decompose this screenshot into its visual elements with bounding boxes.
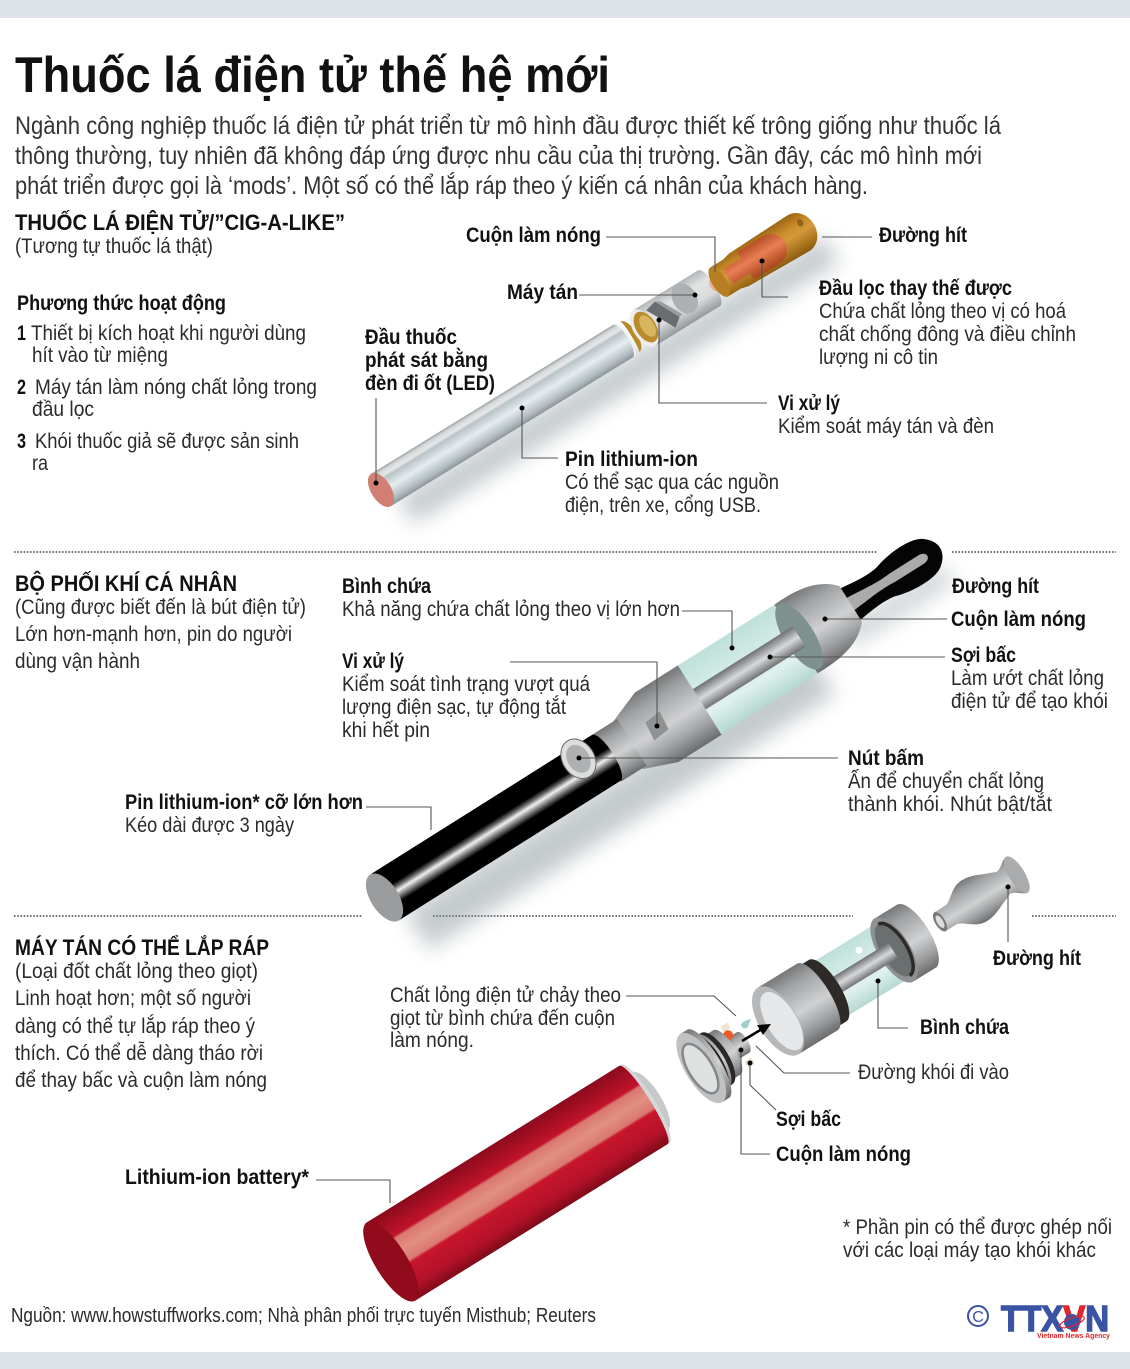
arrow: vapour path: [742, 1024, 771, 1041]
label: tank: Bình chứa: [342, 575, 431, 598]
step 2: Máy tán làm nóng chất lỏng trong: [35, 376, 317, 399]
label: wick: [768, 644, 1108, 713]
source line: Nguồn: www.howstuffworks.com; Nhà phân phối trực tuyến Misthub; Reuters: [11, 1305, 596, 1327]
heading: rebuildable atomizer: MÁY TÁN CÓ THỂ LẮP RÁP: [15, 935, 269, 960]
panel: personal vaporizer description: [15, 570, 306, 673]
label: liquid flow: [390, 984, 736, 1052]
label: heating coil: Cuộn làm nóng: [776, 1143, 911, 1166]
label: heating coil: Cuộn làm nóng: [466, 224, 601, 247]
label: larger lithium-ion battery: Kéo dài được 3 ngày: [125, 814, 294, 837]
label: LED tip: phát sát bằng: [365, 348, 488, 372]
label: airflow: [756, 1046, 1009, 1084]
label: microprocessor: [656, 318, 994, 438]
label: tank: Khả năng chứa chất lỏng theo vị lớn hơn: [342, 598, 680, 621]
illustration: rebuildable atomizer parts: [667, 836, 1044, 1111]
panel: cig-a-like description: [15, 209, 345, 475]
label: tank: [876, 978, 1009, 1039]
label: microprocessor: Vi xử lý: [342, 650, 404, 673]
description: dàng có thể tự lắp ráp theo ý: [15, 1015, 255, 1038]
label: liquid flow: Chất lỏng điện tử chảy theo: [390, 984, 621, 1007]
heading: how it works: Phương thức hoạt động: [17, 292, 226, 315]
label: button: [576, 747, 1052, 816]
label: tank: [342, 575, 734, 650]
label: replaceable cartridge: chất chống đông và điều chỉnh: [819, 323, 1076, 346]
intro text: Ngành công nghiệp thuốc lá điện tử phát triển từ mô hình đầu được thiết kế trông giống như thuốc lá: [15, 112, 1001, 140]
footnote: [843, 1216, 1112, 1262]
label: lithium-ion battery: Pin lithium-ion: [565, 448, 698, 471]
label: microprocessor: Vi xử lý: [778, 392, 840, 415]
description: (Loại đốt chất lỏng theo giọt): [15, 960, 258, 983]
heading: cig-a-like: THUỐC LÁ ĐIỆN TỬ/”CIG-A-LIKE”: [15, 209, 345, 235]
label: inhale path: Đường hít: [993, 947, 1081, 970]
description: để thay bấc và cuộn làm nóng: [15, 1069, 267, 1092]
label: wick: Làm ướt chất lỏng: [951, 667, 1104, 690]
label: LED tip: Đầu thuốc: [365, 326, 457, 349]
label: inhale path: Đường hít: [952, 575, 1039, 598]
label: inhale path: [993, 884, 1081, 970]
callouts: rebuildable atomizer: [125, 884, 1081, 1203]
label: wick: điện tử để tạo khói: [951, 690, 1108, 713]
intro text: thông thường, tuy nhiên đã không đáp ứng được nhu cầu của thị trường. Gần đây, các mô hình mới: [15, 142, 982, 170]
label: microprocessor: [342, 650, 660, 742]
illustration: personal vaporizer: [351, 514, 976, 963]
label: lithium-ion battery: [125, 1166, 390, 1203]
step 1: hít vào từ miệng: [32, 344, 168, 367]
label: heating coil: Cuộn làm nóng: [951, 608, 1086, 631]
step 1: [17, 322, 306, 367]
intro text: phát triển được gọi là ‘mods’. Một số có thể lắp ráp theo ý kiến cá nhân của khách hàng.: [15, 171, 868, 200]
label: wick: Sợi bấc: [776, 1108, 841, 1131]
bottom band: [0, 1352, 1130, 1369]
callouts: cig-a-like: [365, 224, 1076, 517]
label: heating coil: [822, 608, 1086, 631]
logo: TTXVN: C: [972, 1309, 984, 1326]
label: tank: Bình chứa: [920, 1016, 1009, 1039]
illustration: cig-a-like device: [361, 205, 839, 534]
label: replaceable cartridge: lượng ni cô tin: [819, 346, 938, 369]
label: LED tip: [365, 326, 495, 486]
step 1: Thiết bị kích hoạt khi người dùng: [31, 322, 306, 345]
label: heating coil: [738, 1048, 911, 1166]
description: [15, 960, 267, 1092]
step 1: 1: [17, 322, 26, 345]
label: button: Ấn để chuyển chất lỏng: [848, 770, 1044, 793]
label: LED tip: đèn đi ốt (LED): [365, 372, 495, 395]
top band: [0, 0, 1130, 18]
description: (Cũng được biết đến là bút điện tử): [15, 596, 306, 619]
panel: rebuildable atomizer description: [15, 935, 269, 1092]
label: microprocessor: khi hết pin: [342, 719, 430, 742]
step 2: đầu lọc: [32, 398, 94, 421]
label: lithium-ion battery: điện, trên xe, cổng USB.: [565, 494, 761, 517]
label: larger lithium-ion battery: Pin lithium-ion* cỡ lớn hơn: [125, 791, 363, 814]
label: lithium-ion battery: Có thể sạc qua các nguồn: [565, 471, 779, 494]
label: button: thành khói. Nhút bật/tắt: [848, 793, 1052, 816]
label: heating coil: [466, 224, 715, 272]
label: wick: Sợi bấc: [951, 644, 1016, 667]
label: replaceable cartridge: Đầu lọc thay thế được: [819, 277, 1012, 300]
callouts: personal vaporizer: [125, 575, 1108, 837]
step 3: Khói thuốc giả sẽ được sản sinh: [35, 430, 299, 453]
label: lithium-ion battery: Lithium-ion battery*: [125, 1166, 310, 1189]
label: lithium-ion battery: [520, 406, 779, 517]
illustration: red lithium-ion battery: [353, 1056, 684, 1309]
step 3: [17, 430, 299, 475]
description: Lớn hơn-mạnh hơn, pin do người: [15, 623, 292, 646]
label: airflow: Đường khói đi vào: [858, 1061, 1009, 1084]
description: dùng vận hành: [15, 650, 140, 673]
title: Thuốc lá điện tử thế hệ mới: [15, 47, 610, 103]
description: thích. Có thể dễ dàng tháo rời: [15, 1042, 263, 1065]
subheading: (Tương tự thuốc lá thật): [15, 235, 213, 258]
description: Linh hoạt hơn; một số người: [15, 987, 251, 1010]
label: atomizer: [507, 281, 698, 304]
logo: TTXVN: Vietnam News Agency: [1037, 1331, 1111, 1340]
heading: personal vaporizer: BỘ PHỐI KHÍ CÁ NHÂN: [15, 570, 237, 596]
label: wick: [748, 1060, 841, 1131]
step 2: 2: [17, 376, 26, 399]
label: microprocessor: Kiểm soát tình trạng vượt quá: [342, 673, 590, 696]
step 3: ra: [32, 452, 48, 475]
label: inhale path: Đường hít: [879, 224, 967, 247]
label: liquid flow: giọt từ bình chứa đến cuộn: [390, 1007, 615, 1030]
label: microprocessor: Kiểm soát máy tán và đèn: [778, 415, 994, 438]
label: liquid flow: làm nóng.: [390, 1029, 474, 1052]
icon: liquid drop: [741, 1019, 751, 1028]
label: replaceable cartridge: Chứa chất lỏng theo vị có hoá: [819, 300, 1066, 323]
step 3: 3: [17, 430, 26, 453]
label: atomizer: Máy tán: [507, 281, 578, 304]
label: button: Nút bấm: [848, 747, 924, 770]
label: microprocessor: lượng điện sạc, tự động tắt: [342, 696, 566, 719]
footnote: với các loại máy tạo khói khác: [843, 1239, 1096, 1262]
label: larger lithium-ion battery: [125, 791, 431, 837]
intro text: [15, 112, 1001, 200]
logo: TTXVN: TTXVN: [1001, 1298, 1109, 1339]
label: replaceable cartridge: [760, 258, 1076, 369]
step 2: [17, 376, 317, 421]
description: [15, 596, 306, 673]
